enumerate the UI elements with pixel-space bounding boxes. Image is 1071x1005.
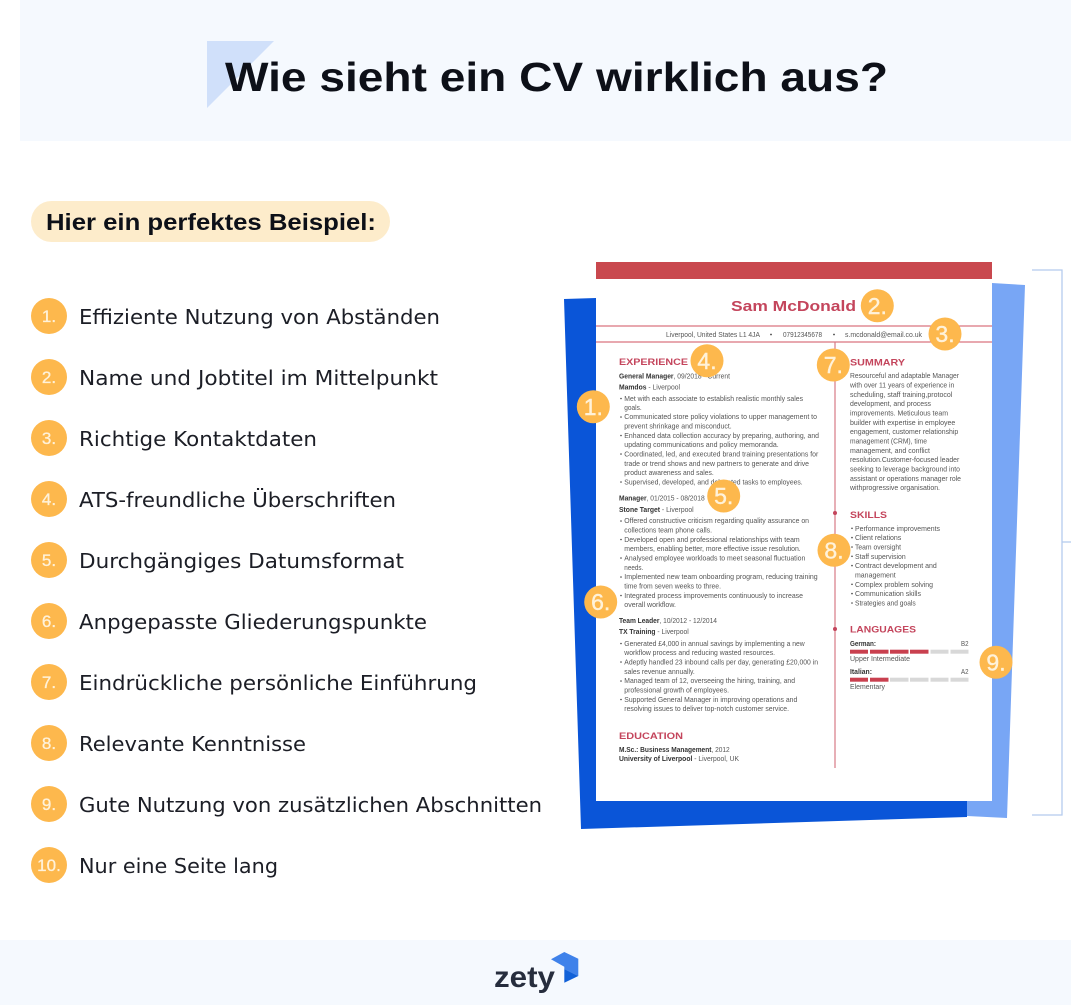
skills section: Client relations [855,533,902,542]
item 7 [31,664,477,700]
education section: EDUCATION [619,731,683,742]
subtitle pill: Hier ein perfektes Beispiel: [46,209,376,235]
experience section: Integrated process improvements continuously to increase [624,591,803,600]
languages section: German: [850,639,876,648]
item 8: Relevante Kenntnisse [79,732,306,756]
contact row: 07912345678 [783,330,822,339]
experience section: TX Training - Liverpool [619,627,689,636]
skills section: Performance improvements [855,524,940,533]
experience section: trade or trend shows and new partners to generate and drive [624,459,809,468]
resume badges [577,289,1012,679]
experience section: Adeptly handled 23 inbound calls per day, generating £20,000 in [624,658,818,666]
skills section: SKILLS [850,510,888,521]
item 8 [31,725,306,761]
summary section: scheduling, staff training,protocol [850,390,953,399]
summary section: assistant or operations manager role [850,474,961,483]
summary section: builder with expertise in employee [850,418,955,427]
contact row: s.mcdonald@email.co.uk [845,330,922,339]
skills section: Communication skills [855,589,921,598]
item 5 [31,542,404,578]
experience section: Stone Target - Liverpool [619,505,694,514]
item 10: 10. [37,856,61,875]
badge 5: 5. [714,483,733,509]
light blue backing sheet [967,283,1025,818]
badge 3: 3. [935,321,955,347]
languages section: Upper Intermediate [850,654,910,663]
item 2: 2. [42,368,56,387]
skills section: Complex problem solving [855,580,933,589]
item 5: Durchgängiges Datumsformat [79,549,404,573]
experience section: Managed team of 12, overseeing the hiring, training, and [624,676,795,685]
summary section: SUMMARY [850,358,906,368]
education section [619,731,739,763]
item 1: 1. [42,307,56,326]
badge 2: 2. [868,293,887,319]
skills section: Staff supervision [855,552,906,561]
languages section: Elementary [850,682,885,691]
experience section: professional growth of employees. [624,686,729,694]
badge 9 [980,646,1012,679]
experience section: sales revenue annually. [624,667,695,676]
item 3 [31,420,317,456]
item 9 [31,786,542,822]
badge 1 [577,390,610,423]
languages section: A2 [961,667,968,676]
icon: title triangle [207,41,274,108]
badge 6 [584,586,617,618]
item 7: 7. [42,673,56,692]
languages section: Italian: [850,667,872,676]
badge 3 [928,318,962,350]
zety logo: zety [494,961,555,994]
item 5: 5. [42,551,56,570]
languages section: LANGUAGES [850,624,917,636]
experience section: Analysed employee workloads to meet seasonal fluctuation [624,554,805,562]
item 9: 9. [42,795,56,814]
languages section: B2 [961,639,968,648]
item 3: 3. [42,429,56,448]
badge 1: 1. [584,394,603,420]
experience section: Mamdos - Liverpool [619,382,680,392]
item 7: Eindrückliche persönliche Einführung [79,671,477,695]
item 10 [31,847,278,883]
item 4 [31,481,396,517]
experience section [619,357,819,713]
column divider [833,342,837,768]
experience section: Supported General Manager in improving operations and [624,695,797,704]
item 4: ATS-freundliche Überschriften [79,487,396,512]
zety logo [494,952,578,994]
summary section: improvements. Meticulous team [850,408,948,418]
experience section: Coordinated, led, and executed brand training presentations for [624,450,819,458]
experience section: General Manager, 09/2018 - Current [619,372,730,380]
badge 6: 6. [591,589,610,615]
checklist [31,298,542,883]
experience section: Offered constructive criticism regarding quality assurance on [624,516,809,525]
summary section [849,358,961,492]
summary section: with over 11 years of experience in [849,380,954,390]
experience section: goals. [624,403,642,412]
skills section: Strategies and goals [855,598,916,608]
experience section: overall workflow. [624,600,676,609]
experience section: EXPERIENCE [619,357,689,368]
summary section: management (CRM), time [850,436,927,446]
badge 7 [817,348,850,382]
title: Wie sieht ein CV wirklich aus? [225,54,888,100]
item 2 [31,359,438,395]
skills section: management [855,570,896,580]
experience section: needs. [624,563,643,572]
experience section: time from seven weeks to three. [624,582,721,590]
skills section: Contract development and [855,561,937,570]
badge 5 [707,480,740,512]
skills section [850,510,940,608]
dark blue backing sheet [564,298,967,829]
item 2: Name und Jobtitel im Mittelpunkt [79,366,438,390]
subtitle pill [31,201,390,242]
summary section: resolution.Customer-focused leader [850,455,960,464]
experience section: Met with each associate to establish realistic monthly sales [624,394,803,403]
experience section: Communicated store policy violations to upper management to [624,412,817,421]
experience section: prevent shrinkage and misconduct. [624,422,732,430]
languages section [850,624,968,691]
contact row: Liverpool, United States L1 4JA [666,330,760,339]
page length bracket [1032,270,1071,815]
summary section: engagement, customer relationship [850,427,958,436]
badge 8 [818,534,850,567]
experience section: Manager, 01/2015 - 08/2018 [619,494,705,502]
contact row [596,326,992,342]
resume top bar [596,262,992,279]
experience section: Team Leader, 10/2012 - 12/2014 [619,616,717,625]
item 4: 4. [42,490,56,509]
badge 9: 9. [986,649,1006,675]
education section: University of Liverpool - Liverpool, UK [619,754,739,763]
summary section: management, and conflict [850,446,930,455]
badge 8: 8. [824,537,844,563]
item 1 [31,298,440,334]
skills section: Team oversight [855,542,901,552]
experience section: Implemented new team onboarding program, reducing training [624,572,818,581]
item 6: Anpgepasste Gliederungspunkte [79,610,427,634]
badge 4: 4. [697,348,717,374]
summary section: Resourceful and adaptable Manager [850,371,960,380]
experience section: Developed open and professional relationships with team [624,535,800,544]
item 1: Effiziente Nutzung von Abständen [79,305,440,329]
experience section: Generated £4,000 in annual savings by implementing a new [624,639,805,648]
item 6 [31,603,427,639]
summary section: seeking to leverage background into [850,464,960,474]
item 9: Gute Nutzung von zusätzlichen Abschnitten [79,793,542,817]
experience section: Supervised, developed, and delegated tasks to employees. [624,478,803,486]
badge 4 [690,344,724,377]
experience section: updating communications and policy memoranda. [624,440,779,449]
resume page [596,262,992,801]
experience section: product awareness and sales. [624,468,714,477]
footer band [0,940,1071,1005]
badge 7: 7. [824,352,843,378]
experience section: Enhanced data collection accuracy by preparing, authoring, and [624,431,819,440]
experience section: resolving issues to deliver top-notch customer service. [624,704,789,713]
education section: M.Sc.: Business Management, 2012 [619,745,730,754]
item 8: 8. [42,734,56,753]
item 10: Nur eine Seite lang [79,854,278,878]
header band [20,0,1071,141]
summary section: withprogressive organisation. [849,483,940,492]
item 6: 6. [42,612,56,631]
item 3: Richtige Kontaktdaten [79,427,317,451]
badge 2 [861,289,894,322]
experience section: workflow process and reducing wasted resources. [623,648,775,657]
summary section: development, and process [850,399,931,408]
resume name: Sam McDonald [731,298,856,315]
experience section: members, enabling better, more effective issue resolution. [624,544,801,553]
experience section: collections team phone calls. [624,526,712,534]
